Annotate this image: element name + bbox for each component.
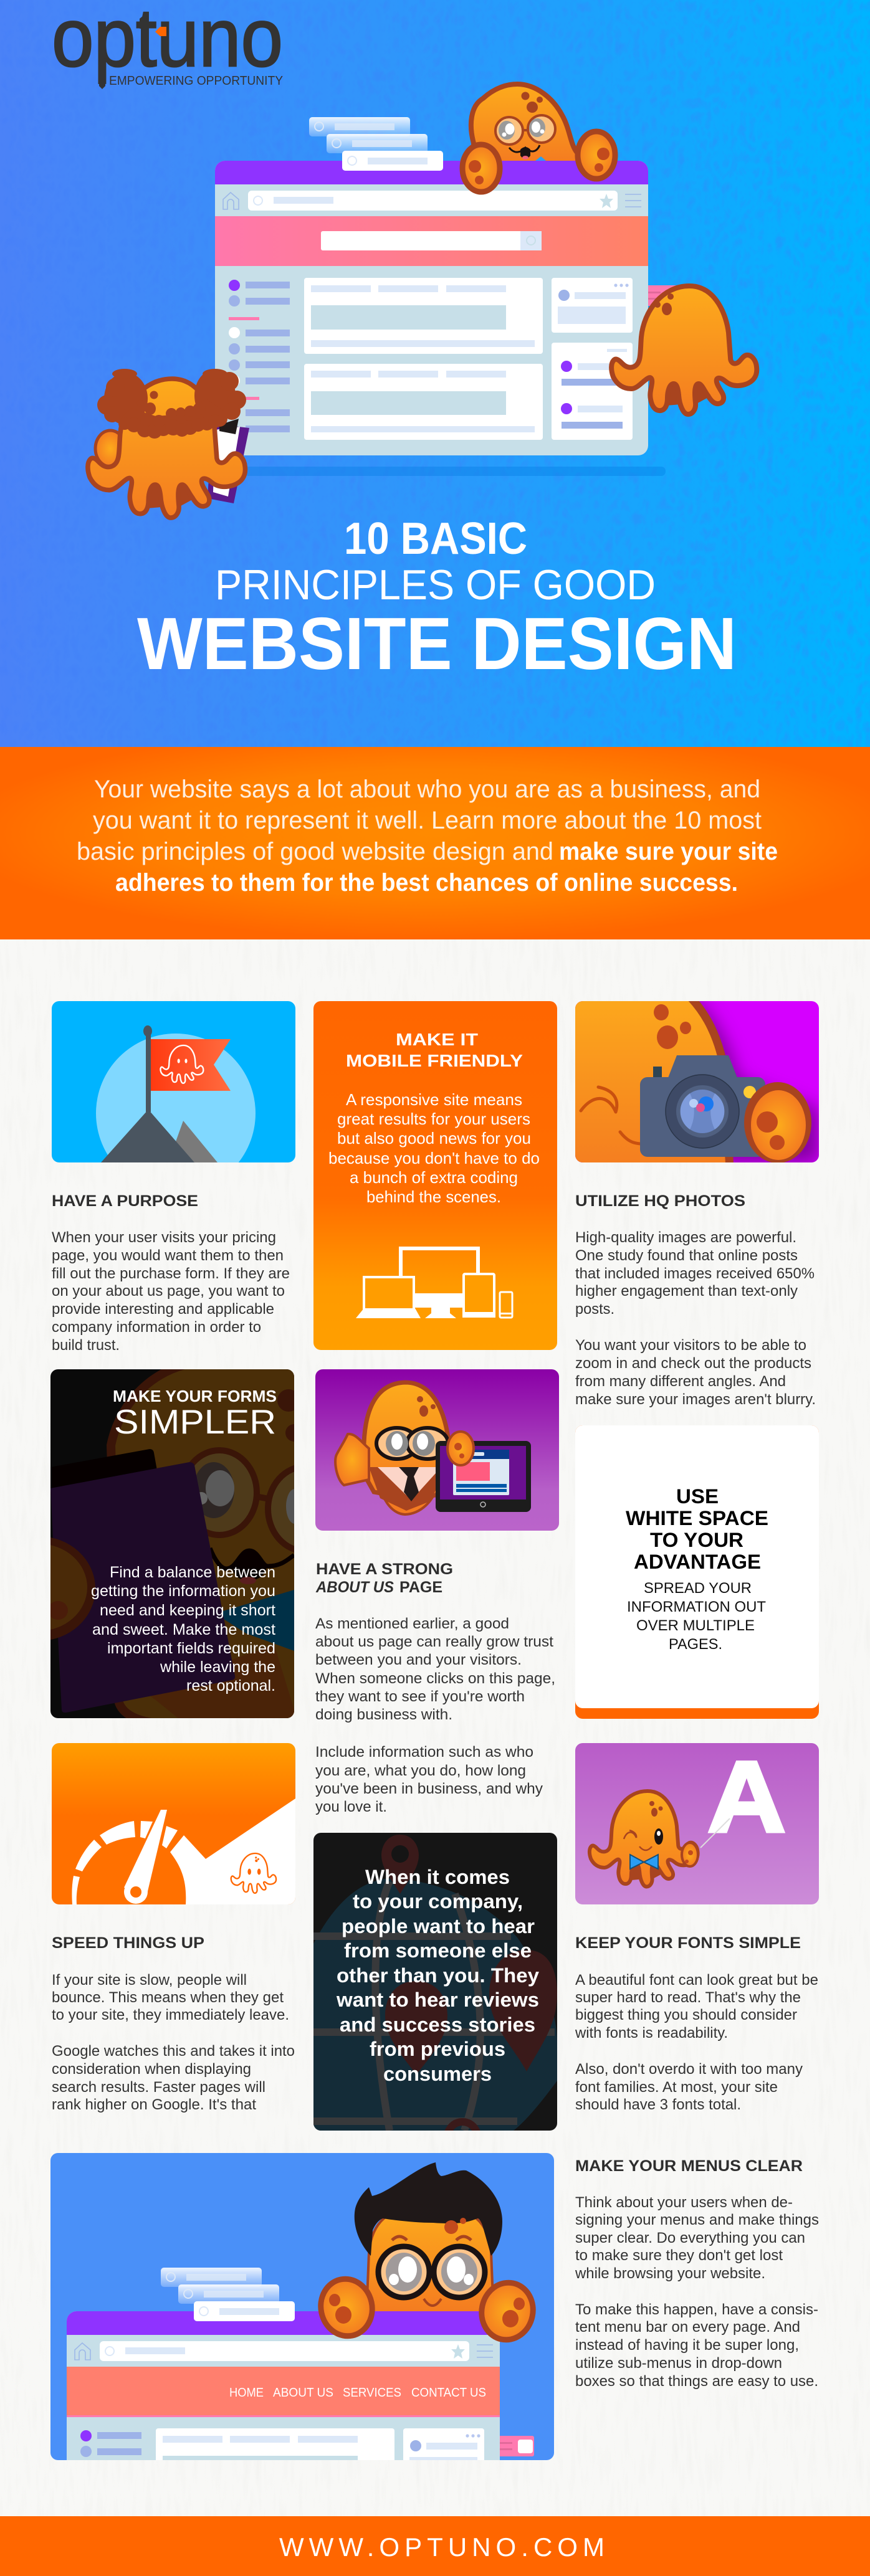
illustration: octopus with letter A — [575, 1741, 819, 1904]
body text: while browsing your website. — [575, 2265, 765, 2282]
panel: intro band — [0, 747, 870, 939]
callout text: and success stories — [340, 2013, 535, 2036]
heading — [315, 1561, 453, 1596]
body text: posts. — [575, 1301, 614, 1318]
panel: use white space — [575, 1425, 819, 1719]
body text: behind the scenes. — [366, 1187, 501, 1206]
heading: HAVE A PURPOSE — [52, 1192, 198, 1210]
body text: getting the information you — [91, 1582, 275, 1600]
intro text: adheres to them for the best chances of online success. — [115, 869, 738, 896]
body text: search results. Faster pages will — [52, 2079, 265, 2096]
body text: utilize sub-menus in drop-down — [575, 2355, 782, 2372]
body text: a bunch of extra coding — [350, 1168, 518, 1187]
heading: MAKE YOUR FORMS — [113, 1387, 277, 1405]
menu labels: HOME — [229, 2386, 264, 2400]
character: right octopus — [611, 286, 757, 414]
illustration: character above browser — [50, 2153, 554, 2576]
body text: while leaving the — [160, 1658, 275, 1676]
body text: biggest thing you should consider — [575, 2007, 797, 2023]
body text: but also good news for you — [337, 1129, 531, 1148]
body text: you love it. — [315, 1799, 387, 1815]
body text: important fields required — [107, 1640, 275, 1657]
callout text: people want to hear — [342, 1915, 535, 1937]
title: WEBSITE DESIGN — [137, 602, 737, 685]
panel: keep your fonts simple — [575, 1741, 819, 2113]
body text: between you and your visitors. — [315, 1652, 522, 1668]
heading: USE — [676, 1485, 719, 1508]
body text: If your site is slow, people will — [52, 1972, 247, 1989]
body text — [52, 1229, 290, 1354]
heading: KEEP YOUR FONTS SIMPLE — [575, 1934, 801, 1952]
body text: should have 3 fonts total. — [575, 2096, 741, 2113]
panel: have a purpose — [52, 1001, 295, 1354]
body text — [91, 1564, 275, 1694]
menu labels: ABOUT US — [273, 2386, 333, 2400]
callout text: When it comes — [365, 1866, 510, 1888]
body text: provide interesting and applicable — [52, 1301, 274, 1318]
body text — [52, 1972, 295, 2113]
heading: PAGE — [399, 1579, 442, 1596]
character: left octopus with hair and clipboard — [88, 369, 249, 518]
illustration: octopus with camera — [575, 1001, 819, 1162]
heading: SPEED THINGS UP — [52, 1934, 204, 1952]
illustration: octopus with letter A: A — [707, 1741, 786, 1853]
callout text: consumers — [383, 2063, 492, 2085]
body text: they want to see if you're worth — [315, 1688, 525, 1705]
intro text: make sure your site — [559, 838, 778, 865]
character: octopus hands — [462, 131, 615, 192]
body text: super hard to read. That's why the — [575, 1989, 801, 2006]
body text: rank higher on Google. It's that — [52, 2096, 256, 2113]
body text — [627, 1580, 766, 1653]
body text — [315, 1615, 555, 1815]
illustration: mountain flag — [52, 1001, 295, 1162]
body text: about us page can really grow trust — [315, 1633, 553, 1650]
body text: boxes so that things are easy to use. — [575, 2373, 818, 2390]
body text: on your about us page, you want to — [52, 1283, 285, 1300]
body text: Find a balance between — [110, 1564, 275, 1581]
body text: you've been in business, and why — [315, 1780, 543, 1797]
browser window — [67, 2268, 534, 2576]
heading — [346, 1030, 523, 1070]
body text: When your user visits your pricing — [52, 1229, 276, 1246]
heading — [113, 1387, 277, 1441]
body text — [575, 1972, 818, 2113]
body text: to make sure they don't get lost — [575, 2247, 783, 2264]
heading: HAVE A STRONG — [316, 1561, 453, 1578]
body text: font families. At most, your site — [575, 2079, 778, 2096]
body text: with fonts is readability. — [575, 2025, 728, 2041]
body text: Google watches this and takes it into — [52, 2043, 295, 2060]
body text: you are, what you do, how long — [315, 1762, 526, 1779]
body text: To make this happen, have a consis- — [575, 2301, 818, 2318]
heading: TO YOUR — [650, 1529, 743, 1551]
body text: signing your menus and make things — [575, 2212, 819, 2228]
character: boy hands — [315, 2274, 538, 2345]
body text: consideration when displaying — [52, 2061, 251, 2078]
menu labels: CONTACT US — [411, 2386, 486, 2400]
callout text: want to hear reviews — [336, 1989, 539, 2011]
menu labels: SERVICES — [343, 2386, 401, 2400]
callout text — [336, 1866, 539, 2085]
body text: PAGES. — [669, 1636, 722, 1653]
body text: doing business with. — [315, 1706, 452, 1723]
body text: to your site, they immediately leave. — [52, 2007, 289, 2023]
body text: High-quality images are powerful. — [575, 1229, 796, 1246]
illustration: speedometer — [52, 1743, 295, 1904]
body text — [328, 1090, 540, 1206]
footer: WWW.OPTUNO.COM — [279, 2532, 605, 2562]
body text: SPREAD YOUR — [644, 1580, 752, 1597]
logo: EMPOWERING OPPORTUNITY — [109, 74, 283, 88]
panel: make your menus clear — [50, 2153, 819, 2576]
panel: speed things up — [52, 1743, 295, 2113]
intro text — [77, 776, 778, 896]
body text: When someone clicks on this page, — [315, 1670, 555, 1687]
callout text: from previous — [370, 2038, 505, 2060]
menu labels — [229, 2386, 486, 2400]
body text: A responsive site means — [346, 1090, 522, 1109]
icon: responsive devices — [356, 1248, 513, 1318]
browser shadow — [244, 467, 666, 476]
body text: that included images received 650% — [575, 1265, 815, 1282]
callout text: to your company, — [353, 1890, 523, 1913]
body text — [575, 2194, 819, 2390]
callout text: from someone else — [344, 1939, 532, 1962]
body text: A beautiful font can look great but be — [575, 1972, 818, 1989]
heading: ADVANTAGE — [634, 1551, 761, 1573]
body text: Also, don't overdo it with too many — [575, 2061, 803, 2078]
title — [137, 514, 737, 685]
heading — [626, 1485, 768, 1573]
body text: OVER MULTIPLE — [636, 1617, 755, 1634]
body text: zoom in and check out the products — [575, 1355, 811, 1372]
body text: higher engagement than text-only — [575, 1283, 798, 1300]
body text: great results for your users — [337, 1110, 530, 1128]
body text: You want your visitors to be able to — [575, 1337, 806, 1354]
body text: fill out the purchase form. If they are — [52, 1265, 290, 1282]
intro text: Your website says a lot about who you are as a business, and — [94, 776, 760, 803]
body text: Include information such as who — [315, 1744, 533, 1761]
heading: MAKE YOUR MENUS CLEAR — [575, 2157, 803, 2175]
illustration: octopus in suit with tablet — [315, 1369, 559, 1531]
character: boy head — [355, 2162, 502, 2314]
illustration: dark map — [313, 1833, 557, 2152]
panel: utilize HQ photos — [561, 984, 819, 1408]
body text: instead of having it be super long, — [575, 2337, 799, 2354]
body text: super clear. Do everything you can — [575, 2230, 805, 2246]
heading: WHITE SPACE — [626, 1507, 768, 1529]
heading: SIMPLER — [114, 1402, 276, 1441]
body text: make sure your images aren't blurry. — [575, 1391, 816, 1408]
heading: MOBILE FRIENDLY — [346, 1051, 523, 1070]
body text: and sweet. Make the most — [92, 1621, 275, 1638]
intro text: basic principles of good website design and — [77, 838, 553, 865]
panel: hero — [0, 0, 870, 747]
callout text: other than you. They — [337, 1964, 539, 1987]
body text: Think about your users when de- — [575, 2194, 793, 2211]
illustration: darkened octopus — [50, 1369, 294, 1718]
browser window illustration — [215, 117, 682, 455]
body text: INFORMATION OUT — [627, 1599, 766, 1615]
character: peeking octopus head — [471, 84, 581, 163]
body text: build trust. — [52, 1337, 120, 1354]
body text: One study found that online posts — [575, 1247, 798, 1264]
panel: have a strong about us page — [315, 1369, 559, 1815]
body text: tent menu bar on every page. And — [575, 2319, 800, 2336]
body text: from many different angles. And — [575, 1373, 786, 1390]
body text: need and keeping it short — [100, 1602, 275, 1619]
body text: bounce. This means when they get — [52, 1989, 284, 2006]
panel: make it mobile friendly — [313, 1001, 557, 1350]
footer — [0, 2516, 870, 2576]
panel: make your forms simpler — [50, 1369, 294, 1718]
body text: rest optional. — [186, 1677, 275, 1694]
intro text: you want it to represent it well. Learn more about the 10 most — [93, 807, 762, 834]
heading: ABOUT US — [315, 1579, 394, 1596]
body text: company information in order to — [52, 1319, 261, 1336]
body text — [575, 1229, 816, 1408]
panel: reviews callout — [313, 1833, 557, 2152]
title: 10 BASIC — [344, 514, 527, 564]
body text: because you don't have to do — [328, 1149, 540, 1167]
heading: UTILIZE HQ PHOTOS — [575, 1192, 745, 1210]
title: PRINCIPLES OF GOOD — [215, 561, 656, 609]
body text: As mentioned earlier, a good — [315, 1615, 509, 1632]
heading: MAKE IT — [396, 1030, 478, 1049]
body text: page, you would want them to then — [52, 1247, 284, 1264]
